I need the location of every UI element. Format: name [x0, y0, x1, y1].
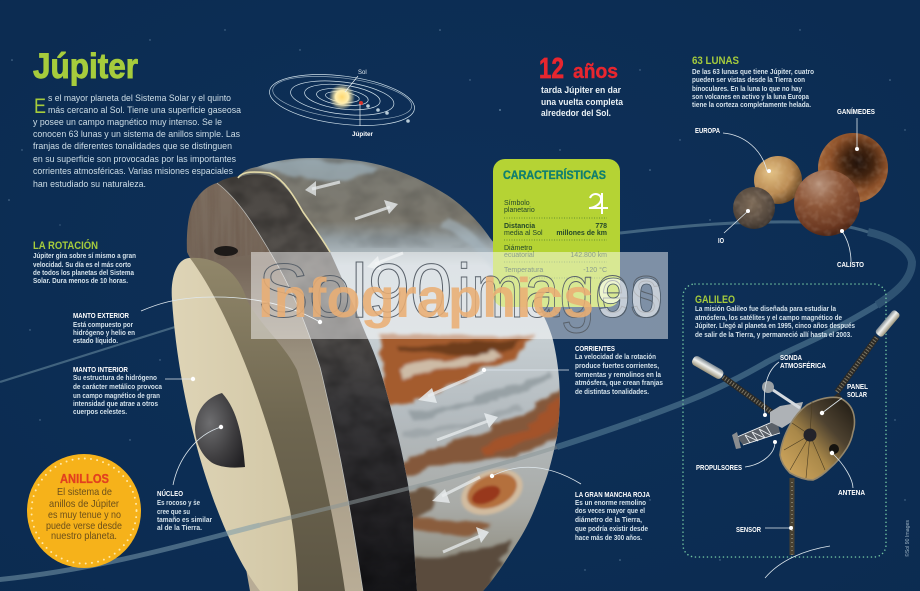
callout: anillos [27, 454, 141, 568]
panel: características: Diámetro [504, 245, 533, 252]
panel: características: media al Sol [504, 230, 543, 237]
outer shell cut face [187, 183, 363, 591]
callout: anillos: es muy tenue y no [48, 509, 121, 521]
label: manto exterior: Está compuesto por [73, 320, 133, 329]
thin section line [217, 183, 363, 591]
panel: características [493, 159, 620, 307]
label: la gran mancha roja: Es un enorme remolino [575, 498, 646, 507]
planet leader lines [141, 297, 581, 485]
panel: características: millones de km [556, 230, 607, 237]
label: corrientes [575, 344, 663, 396]
moon: Europa [754, 156, 802, 204]
section: 63 lunas: De las 63 lunas que tiene Júpiter, cuatro [692, 67, 814, 76]
spacecraft labels and leaders: SENSOR [736, 525, 762, 534]
panel: Galileo: GALILEO [695, 294, 735, 306]
intro paragraph: E [34, 95, 46, 118]
label: manto interior: MANTO INTERIOR [73, 365, 129, 374]
label: núcleo: Es rocoso y se [157, 498, 200, 507]
spacecraft labels and leaders: PANEL [847, 382, 868, 391]
panel: Galileo: La misión Galileo fue diseñada para estudiar la [695, 304, 837, 313]
cylinder caps [875, 309, 901, 338]
section: la rotación: de todos los planetas del Sistema [33, 268, 135, 277]
spacecraft labels and leaders: ANTENA [838, 488, 866, 497]
panel: características: Distancia [504, 223, 535, 230]
section: 63 lunas [692, 55, 814, 109]
spacecraft labels and leaders: ATMOSFÉRICA [780, 361, 827, 370]
watermark banner: images [457, 249, 662, 334]
watermark banner: 90 [597, 266, 663, 329]
intro paragraph: más cercano al Sol. Tiene una superficie gaseosa [48, 105, 242, 116]
panel: Galileo: de salir de la Tierra, y permaneció allí hasta el 2003. [695, 330, 852, 339]
label: manto exterior: estado líquido. [73, 336, 118, 345]
panel: Galileo: Júpiter. Llegó al planeta en 1995, cinco años después [695, 321, 855, 330]
panel: características: 778 [595, 223, 607, 230]
planet cutaway [172, 150, 570, 591]
intro paragraph: han estudiado su naturaleza. [33, 179, 146, 190]
moon surface speckle [734, 135, 888, 236]
label: la gran mancha roja: LA GRAN MANCHA ROJA [575, 490, 651, 499]
section: 63 lunas: 63 LUNAS [692, 55, 739, 67]
label: manto exterior: hidrógeno y helio en [73, 328, 135, 337]
label: la gran mancha roja: hace más de 300 años. [575, 533, 642, 542]
spacecraft labels and leaders: PROPULSORES [696, 463, 742, 472]
section: 63 lunas: binoculares. En la luna Io que no hay [692, 84, 803, 93]
label: corrientes: La velocidad de la rotación [575, 352, 656, 361]
label: corrientes: de distintas tonalidades. [575, 387, 649, 396]
panel: Galileo: atmósfera, los satélites y el campo magnético de [695, 313, 842, 322]
spacecraft labels and leaders: SOLAR [847, 390, 868, 399]
solar system orbit diagram [267, 67, 417, 138]
label: corrientes: atmósfera, que crean franjas [575, 378, 663, 387]
label: manto interior: Su estructura de hidrógeno [73, 373, 157, 382]
moon: Ío [733, 187, 775, 229]
moon: Calisto [794, 170, 860, 236]
panel: características: 142.800 km [570, 252, 607, 259]
spacecraft [690, 309, 901, 555]
inner mantle side [190, 258, 345, 591]
label: manto interior: un campo magnético de gran [73, 391, 160, 400]
dark mantle layer [217, 174, 417, 591]
label: núcleo [157, 489, 212, 532]
hole behind inner disk [214, 246, 238, 256]
great red spot [460, 468, 524, 516]
white rotation arrows [305, 181, 498, 552]
label: manto interior: intensidad que atrae a otros [73, 399, 158, 408]
intro paragraph: corrientes atmosféricas. Varias misiones espaciales [33, 166, 233, 177]
moon labels and leaders: EUROPA [695, 126, 721, 135]
inner mantle face [172, 258, 298, 591]
callout: anillos: puede verse desde [46, 520, 122, 532]
watermark banner: Infographics [258, 266, 594, 329]
label: manto interior [73, 365, 163, 416]
label: la gran mancha roja: que podría existir desde [575, 524, 648, 533]
callout: 12 años: 12 [539, 53, 564, 85]
core [195, 393, 245, 468]
intro paragraph [33, 93, 242, 190]
label: núcleo: NÚCLEO [157, 489, 183, 498]
panel: características: ecuatorial [504, 252, 535, 259]
watermark banner: Sol90 [258, 249, 452, 334]
credit: ©Sol 90 Images [904, 519, 911, 557]
beige rim of cloud layer [238, 172, 330, 252]
high gain antenna dish [780, 397, 854, 480]
panel: características: -120 °C [583, 266, 607, 274]
title: Júpiter [33, 47, 138, 86]
label: corrientes: produce fuertes corrientes, [575, 361, 659, 370]
callout: 12 años: tarda Júpiter en dar [541, 85, 621, 96]
callout: 12 años [539, 53, 624, 119]
callout: 12 años: una vuelta completa [541, 97, 624, 108]
dark mantle mottling [225, 174, 399, 512]
moon: Ganímedes [818, 133, 888, 203]
section: la rotación: Júpiter gira sobre sí mismo a gran [33, 251, 136, 260]
label: la gran mancha roja [575, 490, 651, 542]
panel: características: Símbolo [504, 200, 530, 207]
label: la gran mancha roja: diámetro de la Tierra, [575, 515, 642, 524]
thruster lattice [737, 420, 780, 445]
ring: far side of Jupiter's ring [0, 222, 868, 382]
ring trace near sensor [765, 546, 830, 578]
body and probe arm [770, 402, 803, 428]
label: manto interior: cuerpos celestes. [73, 407, 127, 416]
spacecraft labels and leaders [696, 353, 868, 534]
label: corrientes: tormentas y remolinos en la [575, 370, 662, 379]
callout: anillos: nuestro planeta. [51, 530, 117, 542]
moon labels and leaders: IO [718, 236, 724, 245]
watermark banner [251, 249, 668, 339]
label: núcleo: tamaño es similar [157, 515, 212, 524]
callout: 12 años: alrededor del Sol. [541, 108, 611, 119]
callout: 12 años: años [573, 61, 618, 83]
label: manto interior: de carácter metálico provoca [73, 382, 163, 391]
cloud surface with bands [230, 150, 570, 591]
section: la rotación: Solar. Dura menos de 10 horas. [33, 276, 128, 285]
panel: Galileo [683, 284, 901, 557]
label: manto exterior [73, 311, 135, 345]
panel: características: CARACTERÍSTICAS [503, 167, 606, 182]
moon labels and leaders: GANÍMEDES [837, 107, 875, 116]
booms [723, 337, 877, 422]
callout: anillos: El sistema de [57, 486, 112, 498]
panel: características: planetario [504, 207, 535, 214]
intro paragraph: en su superficie son provocadas por las importantes [33, 154, 236, 165]
icon: Jupiter symbol [589, 193, 608, 214]
moon labels and leaders: CALISTO [837, 260, 864, 269]
label: núcleo: cree que su [157, 507, 190, 516]
ring: near side crossing planet [0, 232, 912, 580]
callout: anillos: anillos de Júpiter [49, 498, 119, 510]
section: 63 lunas: tiene la corteza completamente helada. [692, 100, 811, 109]
intro paragraph: conocen 63 lunas y un sistema de anillos simple. Las [33, 129, 240, 140]
section: 63 lunas: son volcanes en activo y la luna Europa [692, 92, 810, 101]
label: núcleo: al de la Tierra. [157, 523, 202, 532]
solar system orbit diagram: Sol [358, 70, 367, 76]
intro paragraph: y posee un campo magnético muy intenso. Se le [33, 117, 222, 128]
callout: anillos: ANILLOS [60, 471, 109, 486]
label: corrientes: CORRIENTES [575, 344, 615, 353]
intro paragraph: franjas de diferentes tonalidades que se distinguen [33, 141, 232, 152]
label: la gran mancha roja: dos veces mayor que el [575, 506, 645, 515]
section: la rotación: LA ROTACIÓN [33, 239, 98, 252]
moons [730, 130, 890, 240]
intro paragraph: s el mayor planeta del Sistema Solar y el quinto [48, 93, 231, 104]
spacecraft labels and leaders: SONDA [780, 353, 803, 362]
section: la rotación: velocidad. Su día es el más corto [33, 260, 131, 269]
moon labels and leaders [695, 107, 875, 269]
wood grain [189, 184, 266, 252]
solar system orbit diagram: Júpiter [352, 131, 373, 138]
section: la rotación [33, 239, 136, 285]
label: manto exterior: MANTO EXTERIOR [73, 311, 130, 320]
section: 63 lunas: pueden ser vistas desde la Tierra con [692, 75, 805, 84]
panel: características: Temperatura [504, 267, 543, 274]
